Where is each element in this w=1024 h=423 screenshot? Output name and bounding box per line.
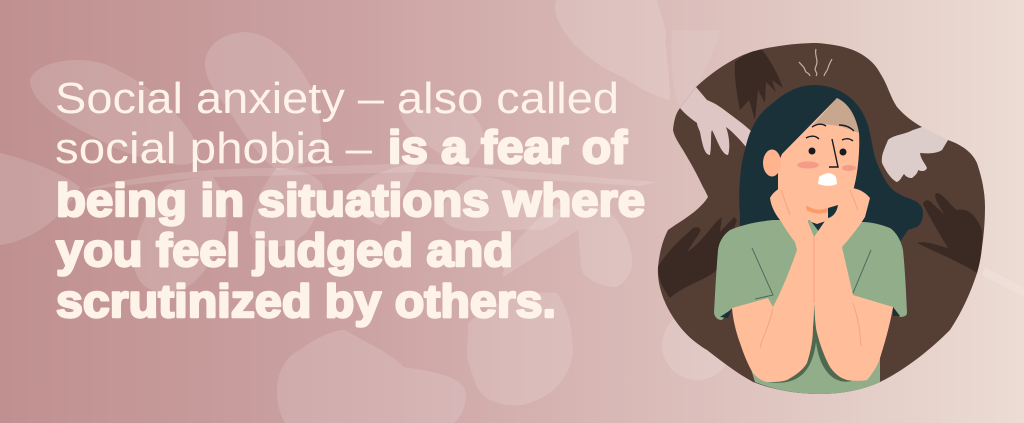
shirt <box>714 220 907 394</box>
regular text lines <box>55 74 619 173</box>
sleeve creases <box>752 248 871 299</box>
facial features <box>797 124 856 171</box>
headline text <box>55 74 645 327</box>
left reaching hand <box>680 87 752 155</box>
shadow hand: lower left <box>658 217 737 298</box>
sleeve openings <box>720 307 900 318</box>
illustration: anxious woman <box>658 43 985 394</box>
bold text lines: being in situations where <box>56 174 645 226</box>
regular text lines: social phobia – <box>55 124 373 173</box>
shadow hand: right <box>917 193 982 273</box>
teeth <box>818 173 837 186</box>
dark blob backdrop <box>658 43 985 394</box>
right arm and fist <box>814 188 893 381</box>
shirt fold shadow <box>768 305 852 383</box>
fist hollow <box>828 205 838 218</box>
ear <box>763 150 781 176</box>
face <box>778 98 859 224</box>
arm creases <box>760 190 861 348</box>
hair <box>739 85 923 262</box>
regular text lines: Social anxiety – also called <box>55 74 619 123</box>
bold text lines <box>56 121 645 327</box>
forehead shadow <box>813 98 859 133</box>
bold text lines: is a fear of <box>388 121 628 173</box>
bold text lines: you feel judged and <box>56 224 513 276</box>
worry squiggles <box>799 49 832 76</box>
right reaching hand <box>882 127 948 182</box>
mouth line <box>805 207 828 212</box>
shadow hand: top <box>735 50 783 120</box>
bold text lines: scrutinized by others. <box>56 275 556 327</box>
left arm and fist <box>732 187 814 382</box>
